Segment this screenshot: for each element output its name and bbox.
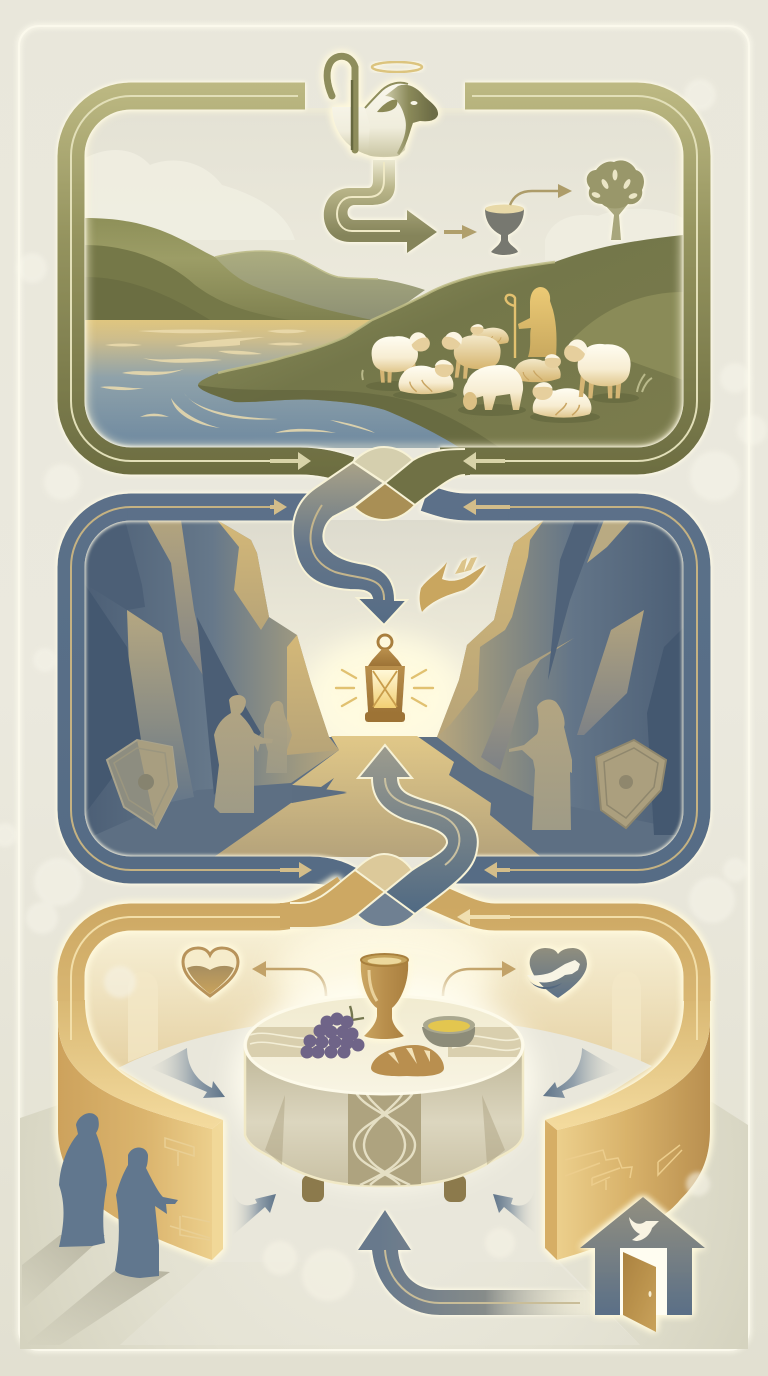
left wall face bbox=[58, 1020, 212, 1260]
gold ribbon left bbox=[71, 888, 345, 1001]
lantern frame bbox=[373, 671, 397, 707]
hill shore shadow bbox=[198, 385, 500, 448]
table runner bbox=[245, 1027, 526, 1057]
door knob bbox=[648, 1291, 652, 1297]
arrow: olive left bbox=[270, 452, 311, 470]
backdrop glow bbox=[275, 920, 495, 1030]
dark right wall bbox=[647, 627, 684, 835]
panel: canyon scene bbox=[84, 520, 684, 857]
olive ribbon left line bbox=[71, 96, 298, 461]
white arm gap bbox=[527, 960, 580, 982]
sheep ear bbox=[377, 100, 397, 112]
lit facet top bbox=[217, 520, 269, 630]
back hill bbox=[215, 251, 425, 322]
right cliff bbox=[437, 520, 684, 830]
heart shape bbox=[530, 948, 587, 998]
house body bbox=[580, 1197, 705, 1315]
panel: table scene backdrop bbox=[85, 929, 684, 1120]
canyon sky bbox=[222, 520, 540, 610]
traveller small bbox=[264, 701, 292, 773]
gold ribbon right bbox=[430, 895, 697, 1001]
arrow: gold right bbox=[457, 909, 510, 925]
lit facet bbox=[437, 520, 544, 737]
table leg right bbox=[444, 1175, 466, 1202]
lantern cap bbox=[368, 649, 402, 666]
olive ribbon right line bbox=[472, 96, 697, 461]
icon: chalice bbox=[361, 954, 408, 1039]
lit stripe bbox=[148, 520, 202, 674]
crook shadow bbox=[351, 80, 353, 150]
sheep gold standing bbox=[442, 332, 501, 379]
bokeh floor spots bbox=[104, 966, 710, 1301]
dove bbox=[629, 1217, 659, 1241]
knot S ribbon with arrow bbox=[293, 462, 407, 625]
door opening bbox=[620, 1248, 667, 1315]
lower stripe bbox=[577, 610, 644, 735]
icon: bread bbox=[371, 1045, 444, 1076]
figure shadows bbox=[22, 1235, 170, 1345]
arrow line bbox=[385, 1250, 580, 1303]
left cliff bbox=[84, 520, 339, 840]
left wall and gold ribbon bbox=[58, 888, 345, 1260]
olive ribbon left bbox=[71, 96, 350, 470]
sheep left lying bbox=[399, 360, 454, 394]
sheep grazing bbox=[463, 365, 523, 410]
tablecloth skirt bbox=[245, 1044, 523, 1186]
icon: heart with embracing hand bbox=[527, 948, 587, 998]
back hill rim bbox=[215, 251, 378, 279]
icon: house with dove and door bbox=[580, 1197, 705, 1332]
blue ribbon right line bbox=[480, 507, 697, 870]
middle stripe bbox=[481, 638, 574, 770]
knot gold strand edge bbox=[290, 870, 385, 928]
S ribbon centre line bbox=[311, 505, 384, 600]
arrow: upper left into table bbox=[150, 1048, 225, 1098]
right wall and gold ribbon bbox=[430, 895, 710, 1260]
arrow: chalice to tree bbox=[510, 184, 572, 205]
dark hill layer bbox=[85, 245, 290, 320]
sheep ground shadows bbox=[366, 381, 639, 423]
hill rim light bbox=[218, 262, 555, 373]
upper dark shoulder bbox=[84, 520, 145, 610]
knot lower diamond bbox=[357, 892, 415, 927]
recess bbox=[548, 520, 600, 680]
left wall bricks bbox=[165, 1138, 210, 1240]
shepherd figure bbox=[506, 287, 557, 358]
window right bbox=[612, 971, 641, 1062]
icon: sheep in crook medallion bbox=[327, 56, 438, 157]
table leg left bbox=[302, 1175, 324, 1202]
knot upper diamond bbox=[355, 854, 412, 892]
right wall top bbox=[545, 1000, 710, 1130]
panel: pasture scene bbox=[85, 156, 683, 448]
icon: lantern bbox=[336, 635, 433, 722]
near hill bbox=[198, 235, 683, 448]
knot olive strand bbox=[385, 449, 470, 505]
S ribbon top bbox=[324, 160, 437, 253]
right shield bbox=[596, 740, 666, 828]
knot gold strand bbox=[280, 870, 385, 928]
bokeh light spots bbox=[0, 79, 767, 934]
sheep small back bbox=[470, 324, 509, 345]
sheep right standing bbox=[564, 339, 631, 398]
lantern ring bbox=[378, 635, 392, 649]
table bbox=[234, 954, 534, 1202]
arrow: olive right bbox=[463, 452, 505, 470]
cloth folds bbox=[265, 1095, 505, 1165]
olive ribbon right bbox=[440, 96, 697, 461]
sheep fleece bbox=[365, 83, 415, 157]
medallion body bbox=[332, 95, 405, 156]
icon: grapes bbox=[300, 1006, 364, 1058]
bottom knot bbox=[280, 854, 415, 928]
S ribbon lower with arrow bbox=[358, 745, 478, 914]
left shield bbox=[107, 740, 177, 828]
lower S ribbon line bbox=[385, 778, 459, 865]
golden path bbox=[214, 736, 541, 857]
left cliff facets bbox=[84, 520, 339, 815]
right wall bricks bbox=[565, 1145, 682, 1190]
knot olive strand edge bbox=[385, 449, 465, 505]
lantern rays bbox=[336, 670, 433, 706]
lantern glow bbox=[312, 634, 458, 734]
panel: table scene lower floor bbox=[20, 1100, 748, 1349]
icon: tree bbox=[587, 160, 644, 240]
sheep head bbox=[385, 85, 438, 155]
arrow: lower right into table bbox=[493, 1190, 535, 1233]
blue ribbon left bbox=[71, 507, 362, 888]
person one bbox=[59, 1113, 107, 1247]
lantern body bbox=[365, 666, 405, 712]
shepherd crook bbox=[327, 56, 355, 150]
right cliff facets bbox=[437, 520, 684, 835]
sheep eye bbox=[410, 101, 418, 105]
arm bbox=[527, 977, 562, 989]
icon: bowl bbox=[422, 1016, 475, 1047]
ribbon line bbox=[337, 162, 400, 231]
arrow: upper right into table bbox=[543, 1048, 620, 1098]
right wall end bbox=[545, 1120, 557, 1260]
knot lower diamond bbox=[354, 483, 415, 520]
gold ribbon left line bbox=[71, 917, 300, 1040]
icon: offering hand bbox=[420, 557, 486, 612]
path crack bbox=[292, 778, 347, 803]
traveller right bbox=[509, 700, 572, 830]
panel inner glow bbox=[85, 108, 683, 448]
lantern base bbox=[365, 712, 405, 722]
travellers left bbox=[214, 695, 292, 813]
table glow bbox=[234, 975, 534, 1185]
blue ribbon left line bbox=[71, 507, 300, 870]
arrow: table to right heart bbox=[443, 961, 516, 996]
ground bbox=[84, 737, 684, 857]
knot upper diamond bbox=[353, 447, 413, 483]
sheep wool edge bbox=[365, 83, 408, 108]
grass tufts bbox=[362, 370, 652, 392]
sheep left standing bbox=[372, 332, 430, 383]
arrow: table to left heart bbox=[252, 961, 326, 996]
right hill layer bbox=[572, 292, 683, 380]
sky bbox=[85, 108, 683, 448]
person two bbox=[115, 1148, 178, 1278]
gold ribbon right line bbox=[510, 917, 697, 1040]
river bbox=[85, 320, 470, 448]
left wall end bbox=[212, 1120, 223, 1260]
arrow: lower left into table bbox=[233, 1193, 276, 1235]
traveller large bbox=[214, 695, 273, 813]
lower floor wedge bbox=[120, 1262, 640, 1345]
top knot bbox=[293, 447, 470, 625]
figures: two people bbox=[59, 1113, 178, 1278]
window left bbox=[128, 971, 158, 1062]
river ripples bbox=[100, 330, 375, 433]
icon: top chalice bbox=[485, 204, 524, 255]
table top bbox=[245, 996, 523, 1094]
left wall top bbox=[58, 1000, 223, 1129]
arrows: blue ribbon bbox=[270, 499, 510, 878]
lit facet bottom bbox=[287, 635, 339, 755]
grey buttress bbox=[127, 610, 194, 810]
flock of sheep bbox=[362, 324, 652, 423]
cloud right bbox=[545, 209, 683, 260]
blue ribbon right bbox=[425, 498, 697, 870]
arrow: bottom curve from house bbox=[358, 1210, 590, 1315]
icon: halo bbox=[372, 62, 422, 72]
door bbox=[623, 1252, 656, 1332]
dark left wall bbox=[84, 583, 141, 815]
sheep front lying bbox=[532, 382, 591, 418]
floor bbox=[118, 1022, 652, 1345]
cloth central band bbox=[348, 1085, 421, 1186]
arrow: small to chalice bbox=[444, 225, 477, 239]
cloth braid bbox=[354, 1085, 415, 1185]
icon: heart with gold fill bbox=[183, 948, 238, 996]
darkest hill layer bbox=[85, 277, 210, 320]
lantern glass bbox=[372, 670, 398, 708]
dark recess bbox=[197, 617, 261, 795]
top stripe bbox=[587, 520, 631, 563]
clouds bbox=[90, 150, 260, 200]
sheep gold lying bbox=[513, 354, 561, 382]
right wall face bbox=[557, 1020, 710, 1260]
front left hill bbox=[85, 218, 372, 320]
